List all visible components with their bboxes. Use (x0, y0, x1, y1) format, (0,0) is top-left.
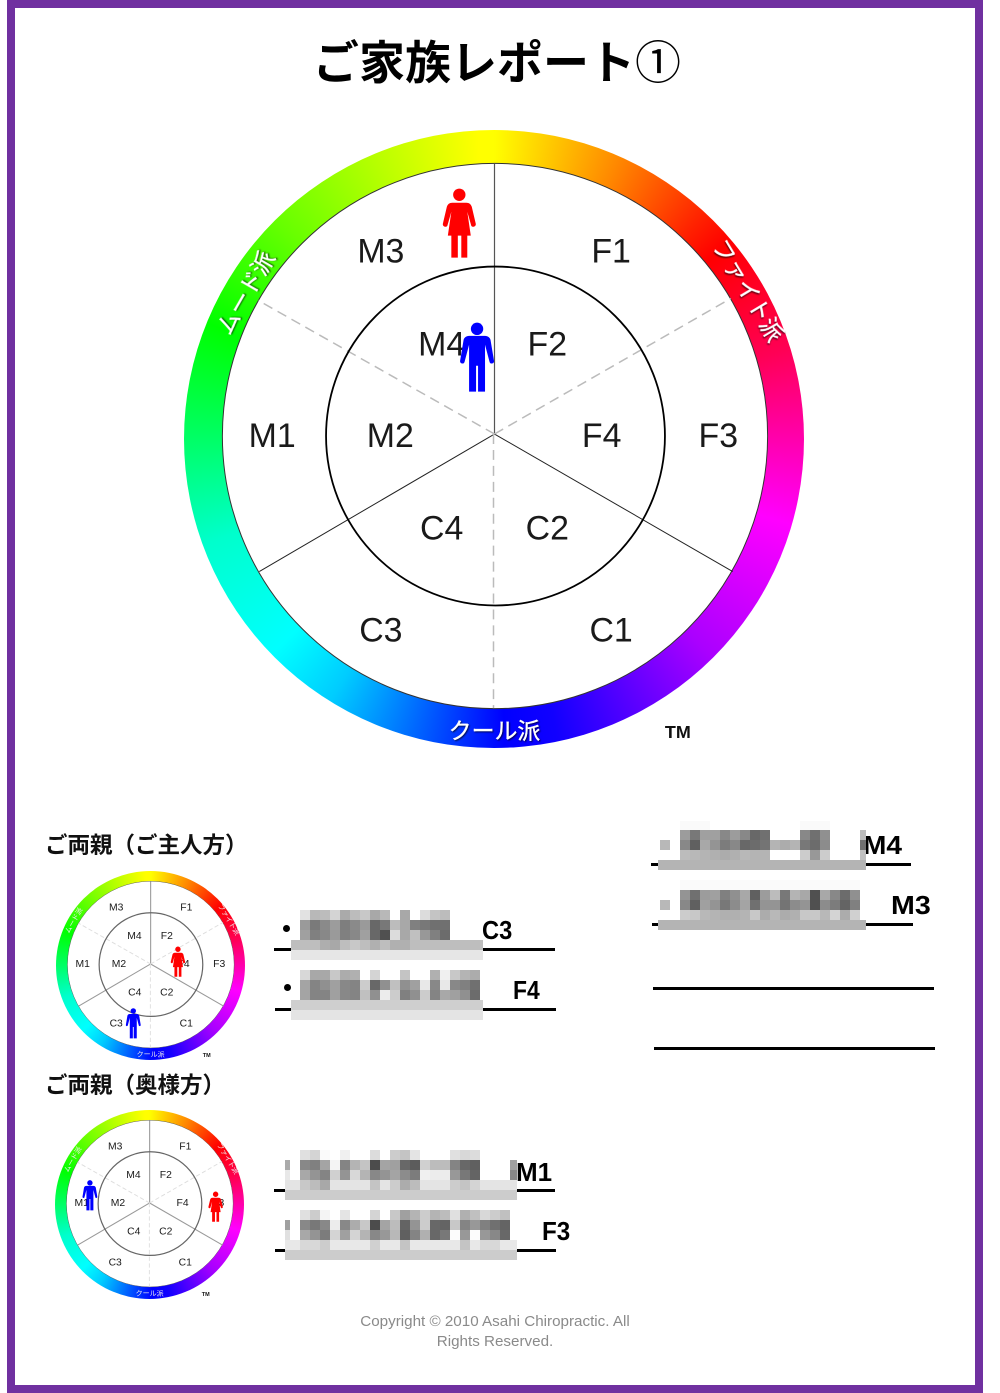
segment labels: C2 (159, 1226, 173, 1237)
ring labels: クール派 (137, 1050, 165, 1058)
title: ご家族レポート① (313, 37, 681, 89)
segment labels (74, 1142, 225, 1269)
type code M3: M3 (891, 890, 931, 920)
copyright: Rights Reserved. (437, 1333, 553, 1350)
segment labels: M2 (367, 417, 414, 455)
segment labels: C1 (179, 1258, 192, 1269)
segment labels: M3 (108, 1142, 123, 1153)
segment labels: C1 (589, 611, 633, 649)
colour ring (184, 130, 804, 748)
segment labels: F3 (699, 417, 738, 455)
wheel diagram (212, 162, 788, 744)
rule: M1 line (274, 1189, 555, 1192)
heading: husband's parents: ご両親（ご主人方） (45, 833, 248, 858)
segment labels: C4 (420, 510, 463, 548)
segment labels: F1 (180, 903, 193, 914)
ring labels: ムード派 (212, 247, 280, 339)
ring labels (64, 903, 241, 1058)
segment labels: M4 (127, 931, 142, 942)
ring labels: ムード派 (63, 1145, 84, 1174)
icon: red woman (208, 1192, 223, 1222)
rule: F3 line (275, 1249, 556, 1252)
segment labels: F2 (160, 1170, 172, 1181)
rule: C3 line (274, 948, 555, 951)
segment labels: M1 (75, 959, 90, 970)
ring labels: ファイト派 (216, 903, 241, 937)
icon: blue man (82, 1180, 97, 1210)
trademark: TM (202, 1292, 210, 1298)
type code C3: C3 (482, 915, 512, 945)
segment labels: F2 (528, 325, 567, 363)
type code F3: F3 (542, 1216, 570, 1246)
segment labels: F1 (179, 1142, 192, 1153)
heading: wife's parents: ご両親（奥様方） (45, 1073, 225, 1098)
colour ring (55, 1110, 244, 1299)
segment labels: C3 (109, 1258, 122, 1269)
mini wheel: wife's parents (55, 1110, 244, 1299)
trademark: TM (203, 1053, 211, 1059)
segment labels: C2 (526, 510, 569, 548)
segment labels: M3 (109, 903, 124, 914)
rule: M3 line (652, 923, 913, 926)
ring labels (63, 1142, 240, 1297)
copyright: Copyright © 2010 Asahi Chiropractic. All (360, 1313, 630, 1330)
rule: blank line 2 (654, 1047, 935, 1050)
wheel diagram (63, 1120, 240, 1298)
pixelated text: F3 row (285, 1210, 517, 1260)
colour ring (56, 871, 245, 1060)
type code F4: F4 (513, 975, 540, 1005)
ring labels: クール派 (449, 718, 540, 744)
segment labels: M2 (111, 1198, 125, 1209)
segment labels: C3 (359, 611, 403, 649)
pixelated text: C3 row (291, 910, 483, 960)
pixelated text: M3 row (658, 890, 866, 930)
pixelated text: M1 row (285, 1150, 517, 1200)
wheel diagram (64, 880, 241, 1059)
ring labels: ファイト派 (215, 1142, 240, 1176)
type code M4: M4 (863, 830, 902, 860)
segment labels: F2 (161, 931, 173, 942)
segment labels (75, 903, 226, 1030)
segment labels: M2 (112, 959, 126, 970)
segment labels: C4 (128, 987, 142, 998)
ring labels: クール派 (136, 1289, 164, 1297)
type code M1: M1 (516, 1157, 552, 1187)
icon: blue man (126, 1008, 141, 1038)
copyright (360, 1313, 630, 1350)
segment labels: M4 (418, 325, 465, 363)
segment labels: F3 (213, 959, 226, 970)
segment labels: C2 (160, 987, 174, 998)
ring labels: ムード派 (64, 906, 85, 935)
segment labels: M3 (357, 233, 404, 271)
segment labels: C3 (110, 1019, 123, 1030)
main colour wheel chart (184, 130, 804, 748)
segment labels: F4 (178, 959, 190, 970)
icon: blue man (460, 323, 494, 392)
bullet C3 (283, 925, 290, 932)
rule: blank line 1 (653, 987, 934, 990)
icon: red woman (443, 189, 476, 258)
ring labels: ファイト派 (707, 235, 788, 346)
icon: red woman (171, 947, 185, 977)
rule: F4 line (275, 1008, 556, 1011)
segment labels: C4 (127, 1226, 141, 1237)
segment labels: M1 (249, 417, 296, 455)
pixelated text: M4 row (658, 830, 866, 870)
segment labels: F3 (212, 1198, 225, 1209)
segment labels: M4 (126, 1170, 141, 1181)
mini wheel: husband's parents (56, 871, 245, 1060)
segment labels: F4 (177, 1198, 189, 1209)
ring labels (212, 235, 788, 744)
segment labels: C1 (180, 1019, 193, 1030)
segment labels: F4 (582, 417, 621, 455)
trademark: TM (665, 722, 691, 742)
segment labels (249, 233, 738, 649)
bullet F4 (284, 984, 291, 991)
segment labels: F1 (591, 233, 631, 271)
pixelated text: F4 row (291, 970, 483, 1020)
segment labels: M1 (74, 1198, 89, 1209)
rule: M4 line (651, 863, 911, 866)
